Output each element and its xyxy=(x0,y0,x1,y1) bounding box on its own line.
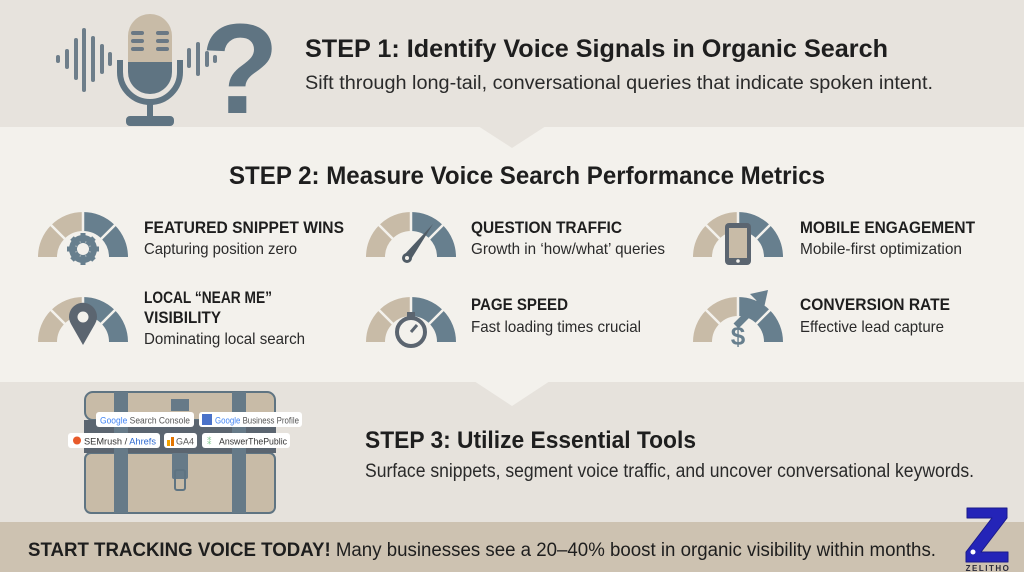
logo: Zelitho xyxy=(966,508,1010,572)
icon: toolbox with tool labels xyxy=(68,392,302,513)
metric: question traffic xyxy=(376,210,665,263)
metric: page speed: PAGE SPEED xyxy=(471,295,568,314)
metric: conversion rate: Effective lead capture xyxy=(800,319,944,336)
callout: bottom message: START TRACKING VOICE TODAY! Many businesses see a 20–40% boost in organic visibility within months. xyxy=(28,540,936,561)
arrow: step 1 to step 2 xyxy=(478,126,546,148)
tool label: Google Business Profile xyxy=(199,412,302,427)
metric: page speed xyxy=(376,295,641,346)
bottom bar xyxy=(0,522,1024,572)
text: step 1 description: Sift through long-tail, conversational queries that indicate spoken intent. xyxy=(305,73,933,94)
icon: microphone with sound waves and question mark xyxy=(58,0,279,141)
tool label: Google Search Console xyxy=(96,412,194,427)
icon: gauge with map pin xyxy=(47,295,118,345)
icon: gauge with gear xyxy=(47,210,118,265)
metric: local near me visibility: VISIBILITY xyxy=(144,308,222,327)
tool label: GA4: GA4 xyxy=(176,436,194,446)
metric: mobile engagement: MOBILE ENGAGEMENT xyxy=(800,218,976,237)
metric: mobile engagement: Mobile-first optimization xyxy=(800,241,962,258)
tool label: GA4 xyxy=(164,433,197,448)
heading: step 3: STEP 3: Utilize Essential Tools xyxy=(365,427,696,454)
metric: question traffic: Growth in ‘how/what’ queries xyxy=(471,241,665,258)
metric: local near me visibility: LOCAL “NEAR ME” xyxy=(144,288,272,307)
icon: gauge with phone xyxy=(702,210,774,265)
icon: gauge with dollar and arrow xyxy=(702,290,774,351)
metric: featured snippet wins: Capturing position zero xyxy=(144,241,297,258)
background: step 1 band xyxy=(0,0,1024,127)
metric: page speed: Fast loading times crucial xyxy=(471,319,641,336)
metric: conversion rate xyxy=(702,290,950,351)
tool label: Google Business Profile: Google Business Profile xyxy=(215,416,299,426)
icon: microphone with sound waves and question mark: ? xyxy=(201,0,279,141)
background: step 2 band xyxy=(0,127,1024,382)
icon: gauge with dollar and arrow: $ xyxy=(731,321,746,351)
icon: gauge with needle xyxy=(376,210,446,263)
metric: local near me visibility xyxy=(47,288,305,348)
text: step 3 description: Surface snippets, segment voice traffic, and uncover conversational keywords. xyxy=(365,461,974,482)
tool label: SEMrush / Ahrefs xyxy=(68,433,160,448)
metric: mobile engagement xyxy=(702,210,976,265)
tool label: AnswerThePublic: AnswerThePublic xyxy=(219,436,287,446)
icon: gauge with stopwatch xyxy=(376,295,446,346)
background: step 3 band xyxy=(0,382,1024,522)
heading: step 2: STEP 2: Measure Voice Search Performance Metrics xyxy=(229,162,825,190)
tool label: AnswerThePublic xyxy=(202,433,290,448)
tool label: SEMrush / Ahrefs: SEMrush / Ahrefs xyxy=(84,436,157,446)
metric: featured snippet wins xyxy=(47,210,344,265)
tool label: Google Search Console: Google Search Console xyxy=(100,416,190,426)
heading: step 1: STEP 1: Identify Voice Signals in Organic Search xyxy=(305,35,888,63)
metric: question traffic: QUESTION TRAFFIC xyxy=(471,218,622,237)
tool label: AnswerThePublic: ⁑ xyxy=(207,436,212,446)
metric: featured snippet wins: FEATURED SNIPPET WINS xyxy=(144,218,344,237)
arrow: step 2 to step 3 xyxy=(474,381,550,406)
metric: conversion rate: CONVERSION RATE xyxy=(800,295,950,314)
metric: local near me visibility: Dominating local search xyxy=(144,331,305,348)
